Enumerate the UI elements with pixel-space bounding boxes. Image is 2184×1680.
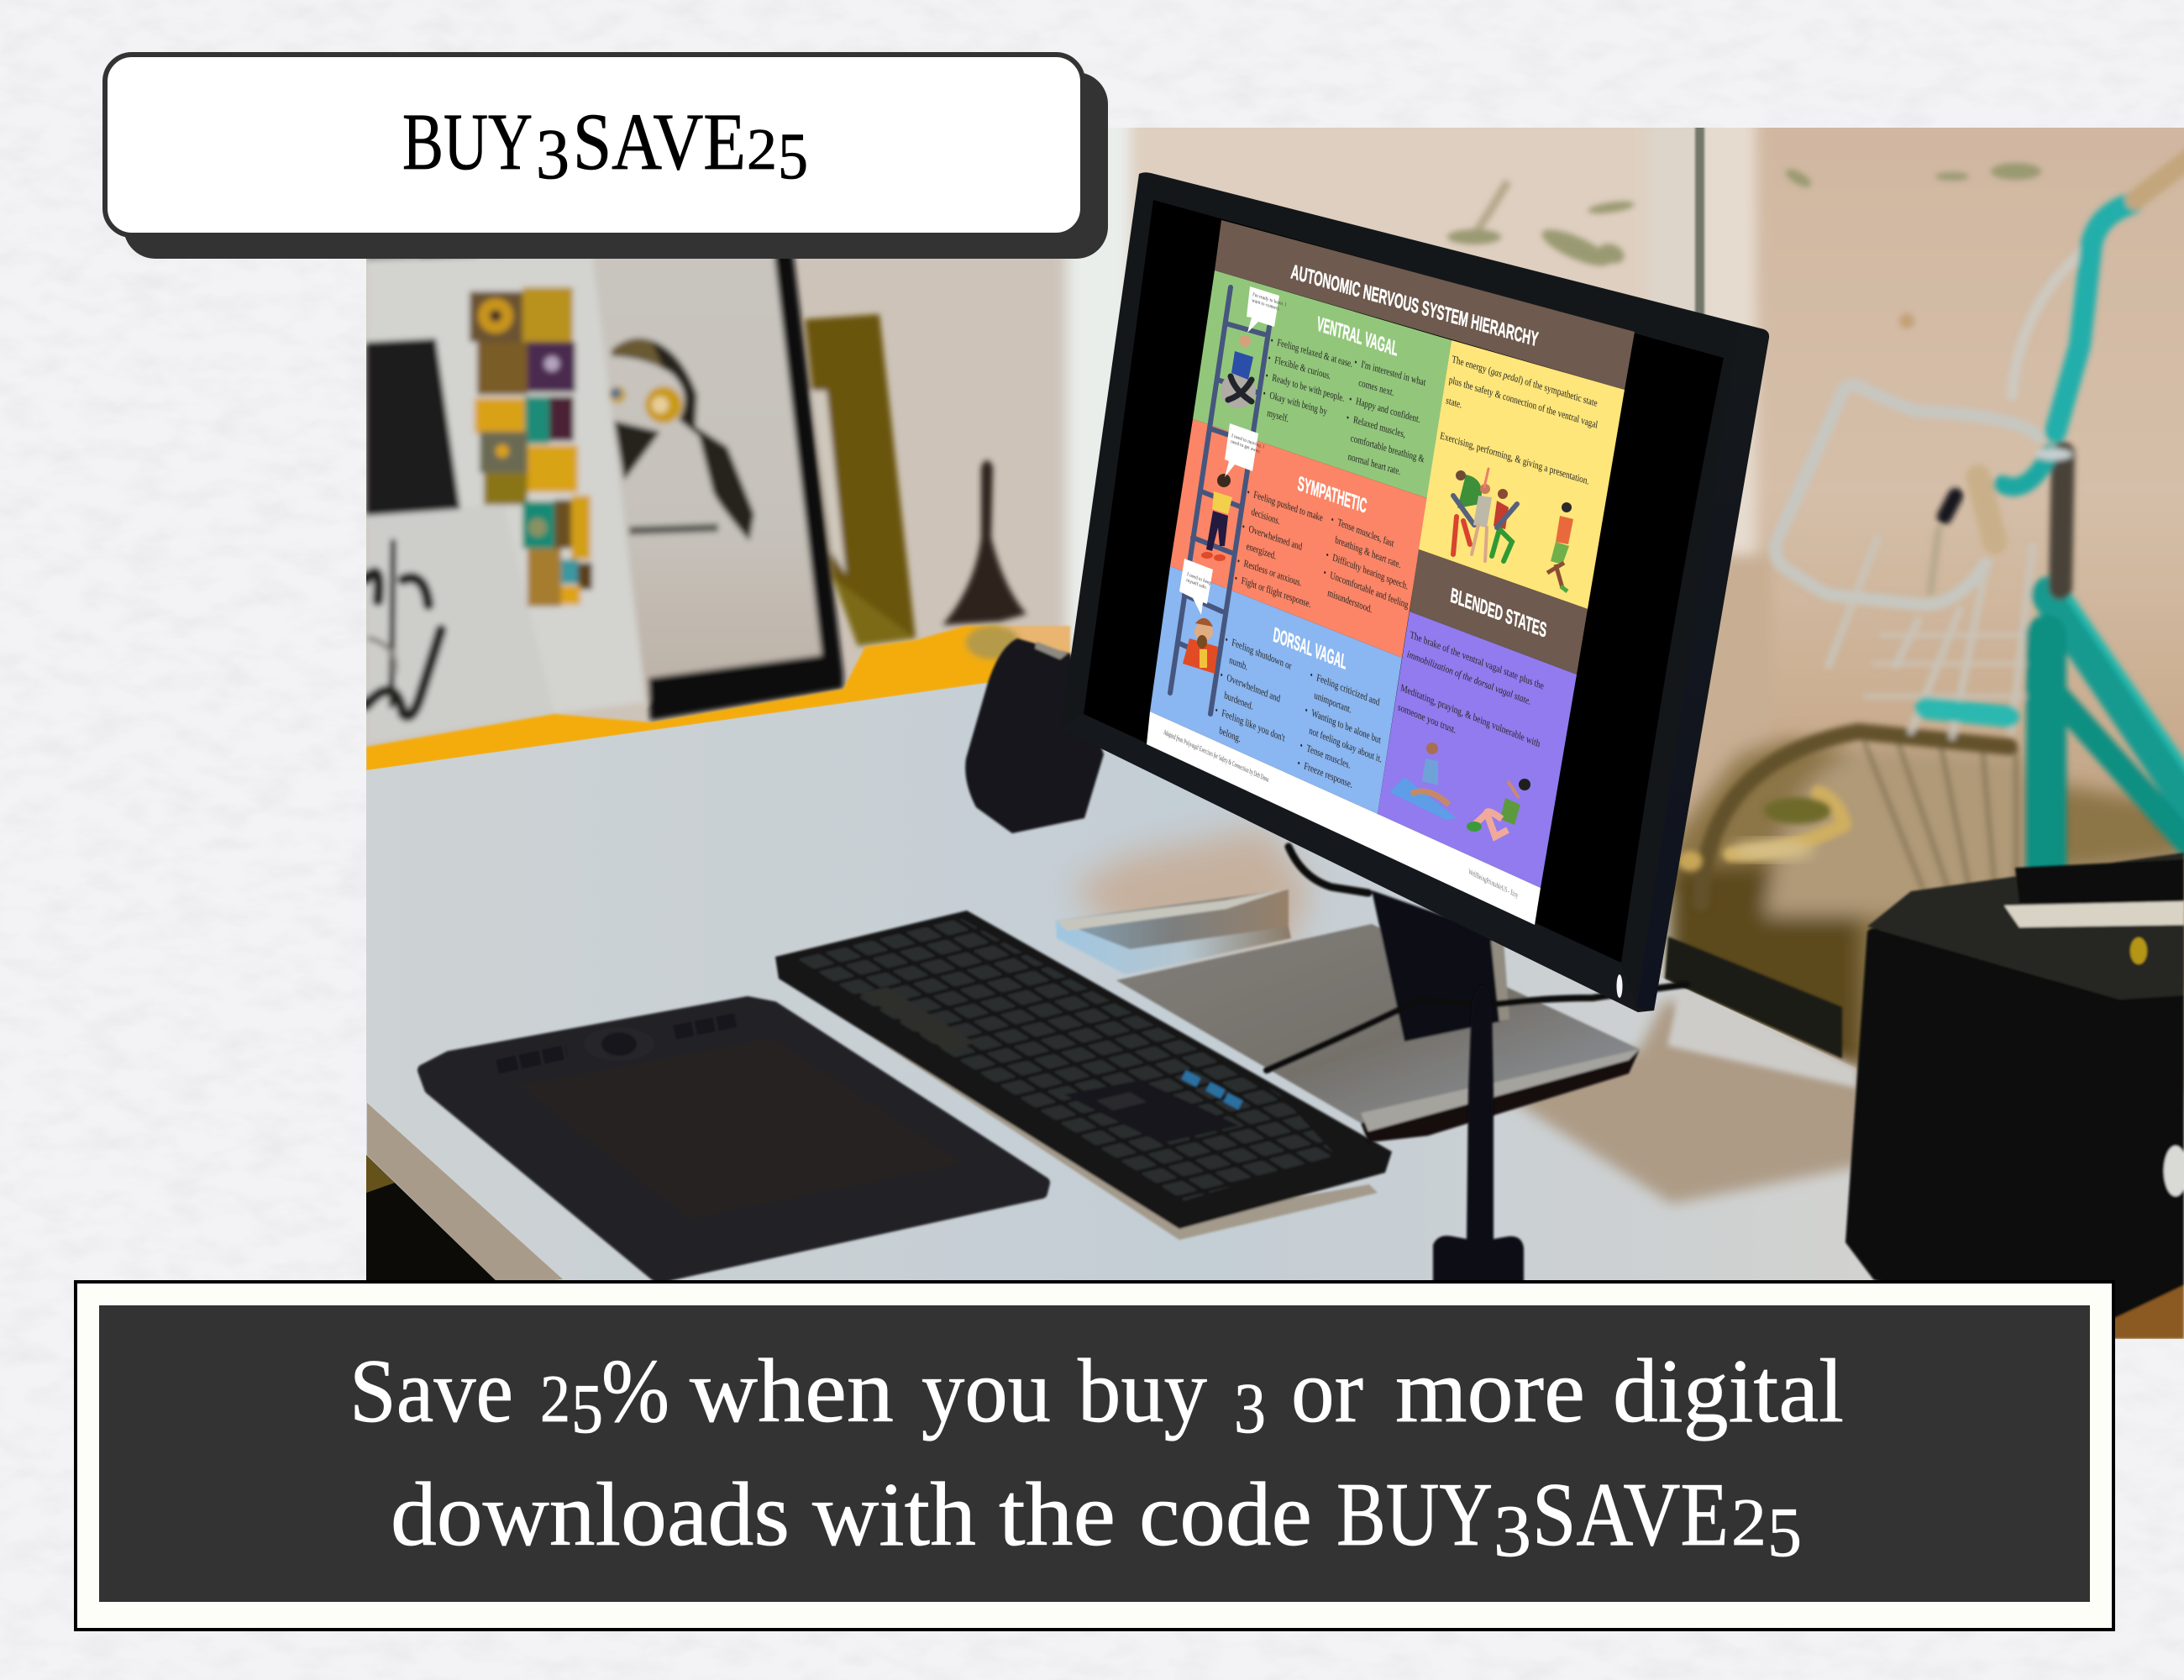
handlebar [2055,203,2132,432]
bubble three: myself safe. [1186,577,1208,591]
sympathetic panel: • [1326,549,1331,562]
sympathetic panel: energized. [1246,540,1277,562]
sympathetic panel: • [1331,514,1336,527]
ventral vagal panel: Happy and confident. [1355,396,1421,426]
tablet active area [518,1038,963,1219]
yellow blended panel: gas pedal) of the sympathetic state [1490,365,1598,409]
dorsal vagal panel: • [1310,669,1315,682]
head tube [2061,454,2063,588]
penguin print [588,252,840,701]
lit blue keys [1181,1070,1243,1110]
stand neck [1372,890,1509,1042]
ventral vagal panel: myself. [1267,407,1289,425]
ventral vagal panel: normal heart rate. [1347,451,1401,478]
sympathetic panel: • [1236,555,1242,568]
bubble three: I need to keep [1187,572,1211,586]
ventral vagal panel: • [1270,335,1276,348]
line one: Save [349,1341,513,1441]
banner dark panel [99,1305,2090,1602]
top edge objects [366,252,467,267]
line two: SAVE [1532,1465,1729,1565]
promo code text: SAVE [573,97,746,186]
teal frame [2050,595,2184,806]
blended states heading band [1410,549,1588,675]
bubble one: want to connect. [1252,298,1281,312]
dorsal vagal panel: unimportant. [1314,690,1352,716]
poster title band: AUTONOMIC NERVOUS SYSTEM HIERARCHY [1289,260,1540,351]
line one: or [1291,1341,1363,1441]
yellow blended panel: The energy ( [1452,354,1492,377]
graphics tablet [423,1002,1044,1278]
penguin shape [612,338,754,541]
cables [1267,847,1687,1070]
ventral vagal panel: • [1265,370,1271,383]
figure: calm man [1221,335,1256,408]
ventral vagal panel: comfortable breathing & [1350,433,1425,465]
line two: with [812,1465,976,1565]
line one: 2 [540,1362,570,1436]
dorsal vagal panel: burdened. [1224,690,1254,712]
banner outer frame [76,1282,2113,1630]
line one: digital [1613,1341,1844,1441]
dorsal vagal panel: not feeling okay about it. [1309,725,1383,765]
sympathetic panel: Feeling pushed to make [1253,489,1324,524]
promo code text: 3 [536,113,570,194]
eiffel tower figurine [942,460,1026,625]
yellow blended panel: Exercising, performing, & giving a presentation. [1440,430,1590,487]
dorsal vagal panel: Overwhelmed and [1226,672,1281,706]
poster footer [1147,711,1541,925]
sympathetic panel: • [1242,521,1247,533]
sympathetic panel: decisions. [1251,506,1281,528]
ladder illustration [1170,287,1269,714]
line one: when [690,1341,894,1441]
poster footer: Adapted from Polyvagal Exercises for Safety & Connection by Deb Dana [1163,727,1269,785]
sympathetic panel: breathing & heart rate. [1335,534,1402,571]
purple blended panel: The brake of the ventral vagal state plus the [1410,629,1545,692]
ventral vagal panel: comes next. [1357,377,1395,399]
bubble two: need to get away. [1231,439,1261,455]
promo code text: BUY [402,97,533,186]
purple blended panel: Meditating, praying, & being vulnerable with [1400,682,1541,750]
right speaker [1845,853,2184,1339]
dorsal vagal panel: DORSAL VAGAL [1272,623,1348,675]
sympathetic panel: • [1247,486,1252,499]
dark lower background [1667,739,2184,1092]
line two: 3 [1494,1491,1531,1572]
sympathetic panel: Restless or anxious. [1243,558,1302,589]
bubble three [1179,559,1213,615]
sympathetic panel: • [1323,567,1329,580]
ventral vagal panel: Feeling relaxed & at ease. [1277,337,1353,370]
ventral vagal panel: Relaxed muscles, [1352,414,1406,440]
sympathetic panel: • [1234,573,1240,585]
dorsal vagal panel: • [1299,740,1305,753]
ventral vagal panel: • [1268,353,1273,365]
panel: bottom banner [76,1282,2113,1630]
yellow blended panel [1419,340,1625,609]
purple blended panel: someone you trust. [1397,701,1457,737]
dorsal vagal panel: Feeling like you don't [1221,707,1285,744]
bicycle in the background [1678,156,2184,903]
panel: desk photograph [366,84,2184,1339]
line two: BUY [1336,1465,1493,1565]
blurred plant leaves [1447,163,2041,328]
sympathetic panel [1170,419,1427,658]
dorsal vagal panel: belong. [1219,725,1242,745]
dorsal vagal panel: • [1215,705,1221,717]
bubble one: I'm ready to learn. I [1252,292,1287,308]
nav gap [1064,1080,1239,1143]
stylus in holder [1433,984,1524,1285]
dorsal vagal panel: • [1297,758,1303,770]
crescent pot highlight behind desk [1730,840,1814,860]
wheel spokes [1865,743,2016,890]
bubble two: I need to moving. I [1231,433,1264,450]
line two: code [1139,1465,1312,1565]
key grid [793,918,1336,1201]
dorsal vagal panel: • [1220,669,1226,682]
meditation illustration [1389,743,1457,820]
line one: more [1395,1341,1585,1441]
box face [105,55,1083,235]
wall behind the desk [366,84,2184,991]
monitor bezel [1062,172,1769,1012]
figure: anxious woman [1201,474,1232,561]
ventral vagal panel: Ready to be with people. [1272,372,1345,404]
dorsal vagal panel: Feeling shutdown or [1231,637,1293,673]
ventral vagal panel [1193,270,1452,498]
line two: downloads [391,1465,790,1565]
box offset shadow [123,72,1108,259]
dorsal vagal panel: Tense muscles. [1306,743,1352,771]
ventral vagal panel: VENTRAL VAGAL [1315,313,1399,361]
bubble one [1247,286,1287,333]
dorsal vagal panel: • [1225,634,1231,647]
figure: withdrawn man [1183,618,1218,674]
line two: the [999,1465,1116,1565]
ventral vagal panel: • [1353,357,1360,370]
tablet buttons and dial [497,1020,738,1067]
dorsal vagal panel: Freeze response. [1304,760,1353,790]
speech bubbles [1179,286,1287,615]
sympathetic panel: SYMPATHETIC [1296,473,1368,518]
ventral vagal panel: I'm interested in what [1361,359,1426,389]
dorsal vagal panel: Feeling criticized and [1316,672,1381,709]
dorsal vagal panel: Wanting to be alone but [1311,707,1382,746]
line one: you [921,1341,1051,1441]
runner illustration [1547,502,1573,591]
promo code text: 5 [778,119,808,192]
line one: % [601,1341,669,1441]
bubble two [1225,423,1264,477]
dorsal vagal panel: • [1305,705,1310,717]
stand base [1361,1049,1640,1142]
purple blended panel [1378,612,1577,888]
keyboard [775,911,1392,1240]
dark shelf behind monitor [1665,937,1842,1058]
sympathetic panel: Tense muscles, fast [1337,517,1394,549]
framed prints on shelf [366,252,1026,743]
ventral vagal panel: • [1346,412,1352,425]
line one: buy [1078,1341,1207,1441]
left desktop speaker [965,638,1104,833]
sympathetic panel: misunderstood. [1327,587,1373,616]
line two: 5 [1767,1494,1802,1572]
white card [366,252,646,743]
ventral vagal panel: Flexible & curious. [1274,354,1331,382]
panel: promo code box [105,55,1108,259]
object on speaker [2015,859,2184,903]
space bar [859,987,974,1053]
line one: 5 [571,1370,603,1448]
yellow blended panel: plus the safety & connection of the ventral vagal [1448,375,1599,431]
black screen area [1084,200,1724,963]
notebook [1056,889,1291,974]
olive frame [805,314,916,646]
yellow blended panel: state. [1445,395,1462,411]
sympathetic panel: Difficulty hearing speech. [1332,552,1409,592]
ventral vagal panel: Okay with being by [1269,390,1328,417]
poster footer: WellBeingPrintableUS - Etsy [1468,867,1519,900]
sympathetic panel: Overwhelmed and [1248,523,1304,554]
dorsal vagal panel: numb. [1229,654,1248,673]
computer monitor [1062,172,1769,1012]
sympathetic panel: Fight or flight response. [1241,575,1312,611]
nav cluster keys [1096,1092,1147,1110]
power LED [1616,974,1623,998]
poster displayed on screen [1147,220,1635,925]
line one: 3 [1234,1368,1266,1448]
yellow shelf [366,626,1070,771]
sympathetic panel: Uncomfortable and feeling [1330,570,1410,612]
line two: 2 [1731,1486,1767,1560]
monitor stand [1116,847,1687,1142]
basket [1776,385,2039,605]
blended states heading band: BLENDED STATES [1449,584,1548,643]
dorsal vagal panel [1150,566,1402,814]
banner text [349,1341,1844,1572]
ventral vagal panel: • [1348,394,1354,407]
reclining figure illustration [1467,779,1530,837]
dancing group illustration [1453,469,1517,561]
ventral vagal panel: • [1263,388,1268,401]
calligraphy [366,542,441,716]
white desk surface [366,664,1882,1294]
promo code text: 2 [747,118,777,182]
purple blended panel: immobilization of the dorsal vagal state. [1406,648,1531,707]
poster title band [1215,220,1635,390]
mosaic [470,287,592,606]
